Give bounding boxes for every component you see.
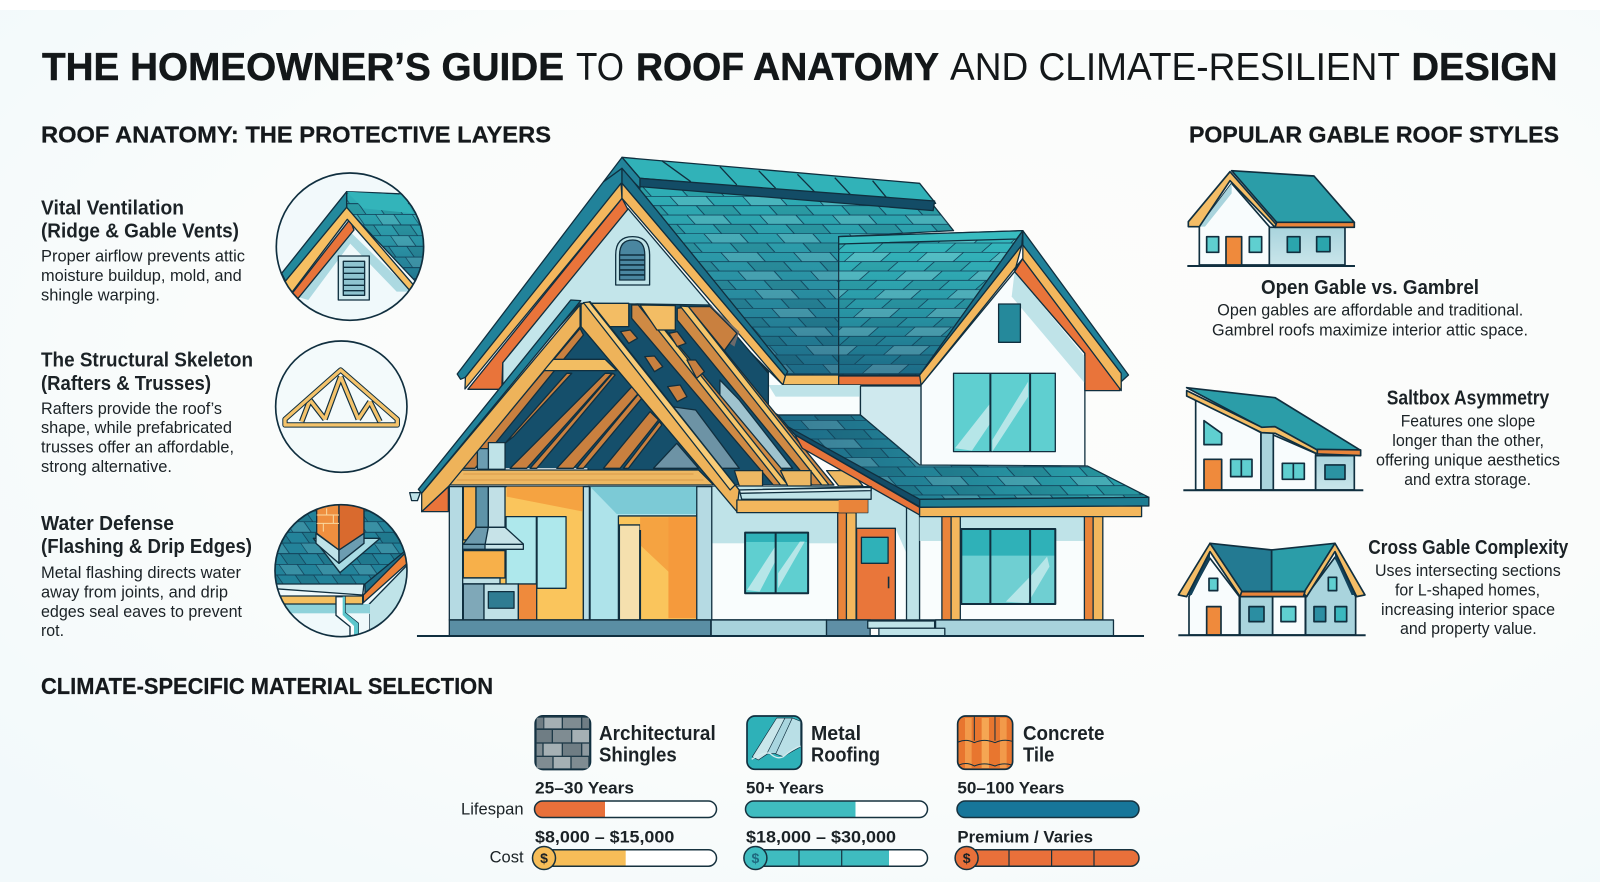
heading: material selection: CLIMATE-SPECIFIC MATERIAL SELECTION <box>41 673 493 699</box>
foundation and steps <box>711 620 1113 636</box>
material: concrete tile: Concrete <box>1023 723 1104 745</box>
exposed rafters <box>588 303 863 486</box>
material: metal roofing <box>744 716 928 870</box>
text block: water defense: away from joints, and drip <box>41 584 228 602</box>
lower right wall, door and windows <box>711 487 1103 620</box>
text block: vital ventilation: shingle warping. <box>41 287 160 305</box>
text block: vital ventilation: Proper airflow prevents attic <box>41 248 245 266</box>
style: cross gable: increasing interior space <box>1381 601 1555 619</box>
material: architectural shingles: Shingles <box>599 745 677 767</box>
icon: truss detail circle <box>276 341 407 472</box>
icon: open gable house <box>1187 171 1355 266</box>
gutter and eave board <box>410 487 871 513</box>
big upper window <box>954 373 1055 452</box>
main gable fascia boards <box>457 168 788 389</box>
title: ROOF ANATOMY <box>636 46 939 89</box>
text block: structural skeleton: shape, while prefabricated <box>41 419 232 437</box>
style: cross gable: Uses intersecting sections <box>1375 562 1561 580</box>
right gable wall <box>920 231 1129 466</box>
main house illustration <box>410 157 1149 636</box>
text block: structural skeleton: strong alternative. <box>41 458 172 476</box>
material: metal roofing: Roofing <box>811 745 880 767</box>
back roof with ridge <box>604 157 954 375</box>
text block: vital ventilation: (Ridge & Gable Vents) <box>41 221 239 243</box>
cross gable roof <box>783 231 1023 385</box>
text block: structural skeleton: (Rafters & Trusses) <box>41 373 211 395</box>
row label: lifespan: Lifespan <box>461 800 524 818</box>
style: open gable: Open gables are affordable and traditional. <box>1217 302 1523 320</box>
text block: structural skeleton: Rafters provide the roof’s <box>41 400 222 418</box>
style: saltbox: Features one slope <box>1401 413 1535 431</box>
cost bar: $ <box>963 850 971 866</box>
material: architectural shingles <box>532 716 716 870</box>
material: concrete tile: 50–100 Years <box>957 778 1064 797</box>
text block: structural skeleton: The Structural Skeleton <box>41 350 253 372</box>
text block: structural skeleton <box>41 350 253 476</box>
material: concrete tile: Premium / Varies <box>957 828 1093 847</box>
cost bar: $ <box>752 850 760 866</box>
text block: water defense: rot. <box>41 622 64 640</box>
style: cross gable: for L-shaped homes, <box>1395 581 1540 599</box>
icon: saltbox house <box>1183 388 1363 490</box>
text block: vital ventilation: moisture buildup, mold, and <box>41 267 242 285</box>
material: architectural shingles: $8,000 – $15,000 <box>535 828 674 847</box>
style: cross gable: Cross Gable Complexity <box>1368 537 1569 559</box>
material: architectural shingles: 25–30 Years <box>535 778 634 797</box>
style: saltbox: Saltbox Asymmetry <box>1387 388 1550 410</box>
style: saltbox: longer than the other, <box>1392 432 1544 450</box>
style: saltbox: and extra storage. <box>1404 471 1531 489</box>
material: concrete tile: Tile <box>1023 745 1054 767</box>
material: metal roofing: 50+ Years <box>746 778 824 797</box>
cost bar: $ <box>540 850 548 866</box>
style: saltbox <box>1183 388 1560 490</box>
porch roof <box>778 415 1149 517</box>
cost bar <box>744 846 928 870</box>
title: AND CLIMATE-RESILIENT <box>950 46 1400 89</box>
timber truss, front cutaway <box>418 300 739 512</box>
upper mid walls <box>751 353 921 468</box>
text block: water defense <box>41 513 252 640</box>
title <box>42 46 1558 89</box>
material: architectural shingles: Architectural <box>599 723 716 745</box>
text block: vital ventilation: Vital Ventilation <box>41 198 184 220</box>
text block: water defense: Metal flashing directs water <box>41 564 242 582</box>
title: TO <box>576 46 624 89</box>
icon: metal panels <box>747 716 802 769</box>
title: THE HOMEOWNER’S GUIDE <box>42 46 564 89</box>
text block: structural skeleton: trusses offer an affordable, <box>41 439 234 457</box>
icon: shingles <box>535 716 591 770</box>
lifespan bar <box>957 801 1139 818</box>
style: open gable: Gambrel roofs maximize interior attic space. <box>1212 321 1528 339</box>
text block: vital ventilation <box>41 198 245 305</box>
icon: roof tiles <box>958 716 1013 769</box>
heading: gable roof styles: POPULAR GABLE ROOF STYLES <box>1189 122 1559 148</box>
kitchen and room cutaway <box>449 487 712 636</box>
lifespan bar <box>745 801 928 818</box>
lifespan bar <box>534 801 716 818</box>
material: metal roofing: $18,000 – $30,000 <box>746 828 896 847</box>
title: DESIGN <box>1412 46 1558 89</box>
style: open gable <box>1187 171 1528 339</box>
main gable wall with arched vent <box>503 208 720 390</box>
text block: water defense: edges seal eaves to prevent <box>41 603 242 621</box>
material: metal roofing: Metal <box>811 723 861 745</box>
material: concrete tile <box>955 716 1139 870</box>
cost bar <box>955 846 1139 870</box>
style: saltbox: offering unique aesthetics <box>1376 452 1560 470</box>
style: cross gable <box>1178 537 1569 638</box>
style: open gable: Open Gable vs. Gambrel <box>1261 277 1479 299</box>
cost bar <box>532 846 716 870</box>
ground line <box>417 635 1144 637</box>
row label: cost: Cost <box>490 848 524 866</box>
icon: cross gable house <box>1178 543 1366 635</box>
icon: ventilation detail circle <box>276 173 430 323</box>
text block: water defense: Water Defense <box>41 513 174 535</box>
text block: water defense: (Flashing & Drip Edges) <box>41 536 252 558</box>
style: cross gable: and property value. <box>1400 620 1537 638</box>
heading: roof anatomy: ROOF ANATOMY: THE PROTECTIVE LAYERS <box>41 122 551 148</box>
icon: water defense detail circle <box>274 504 408 638</box>
